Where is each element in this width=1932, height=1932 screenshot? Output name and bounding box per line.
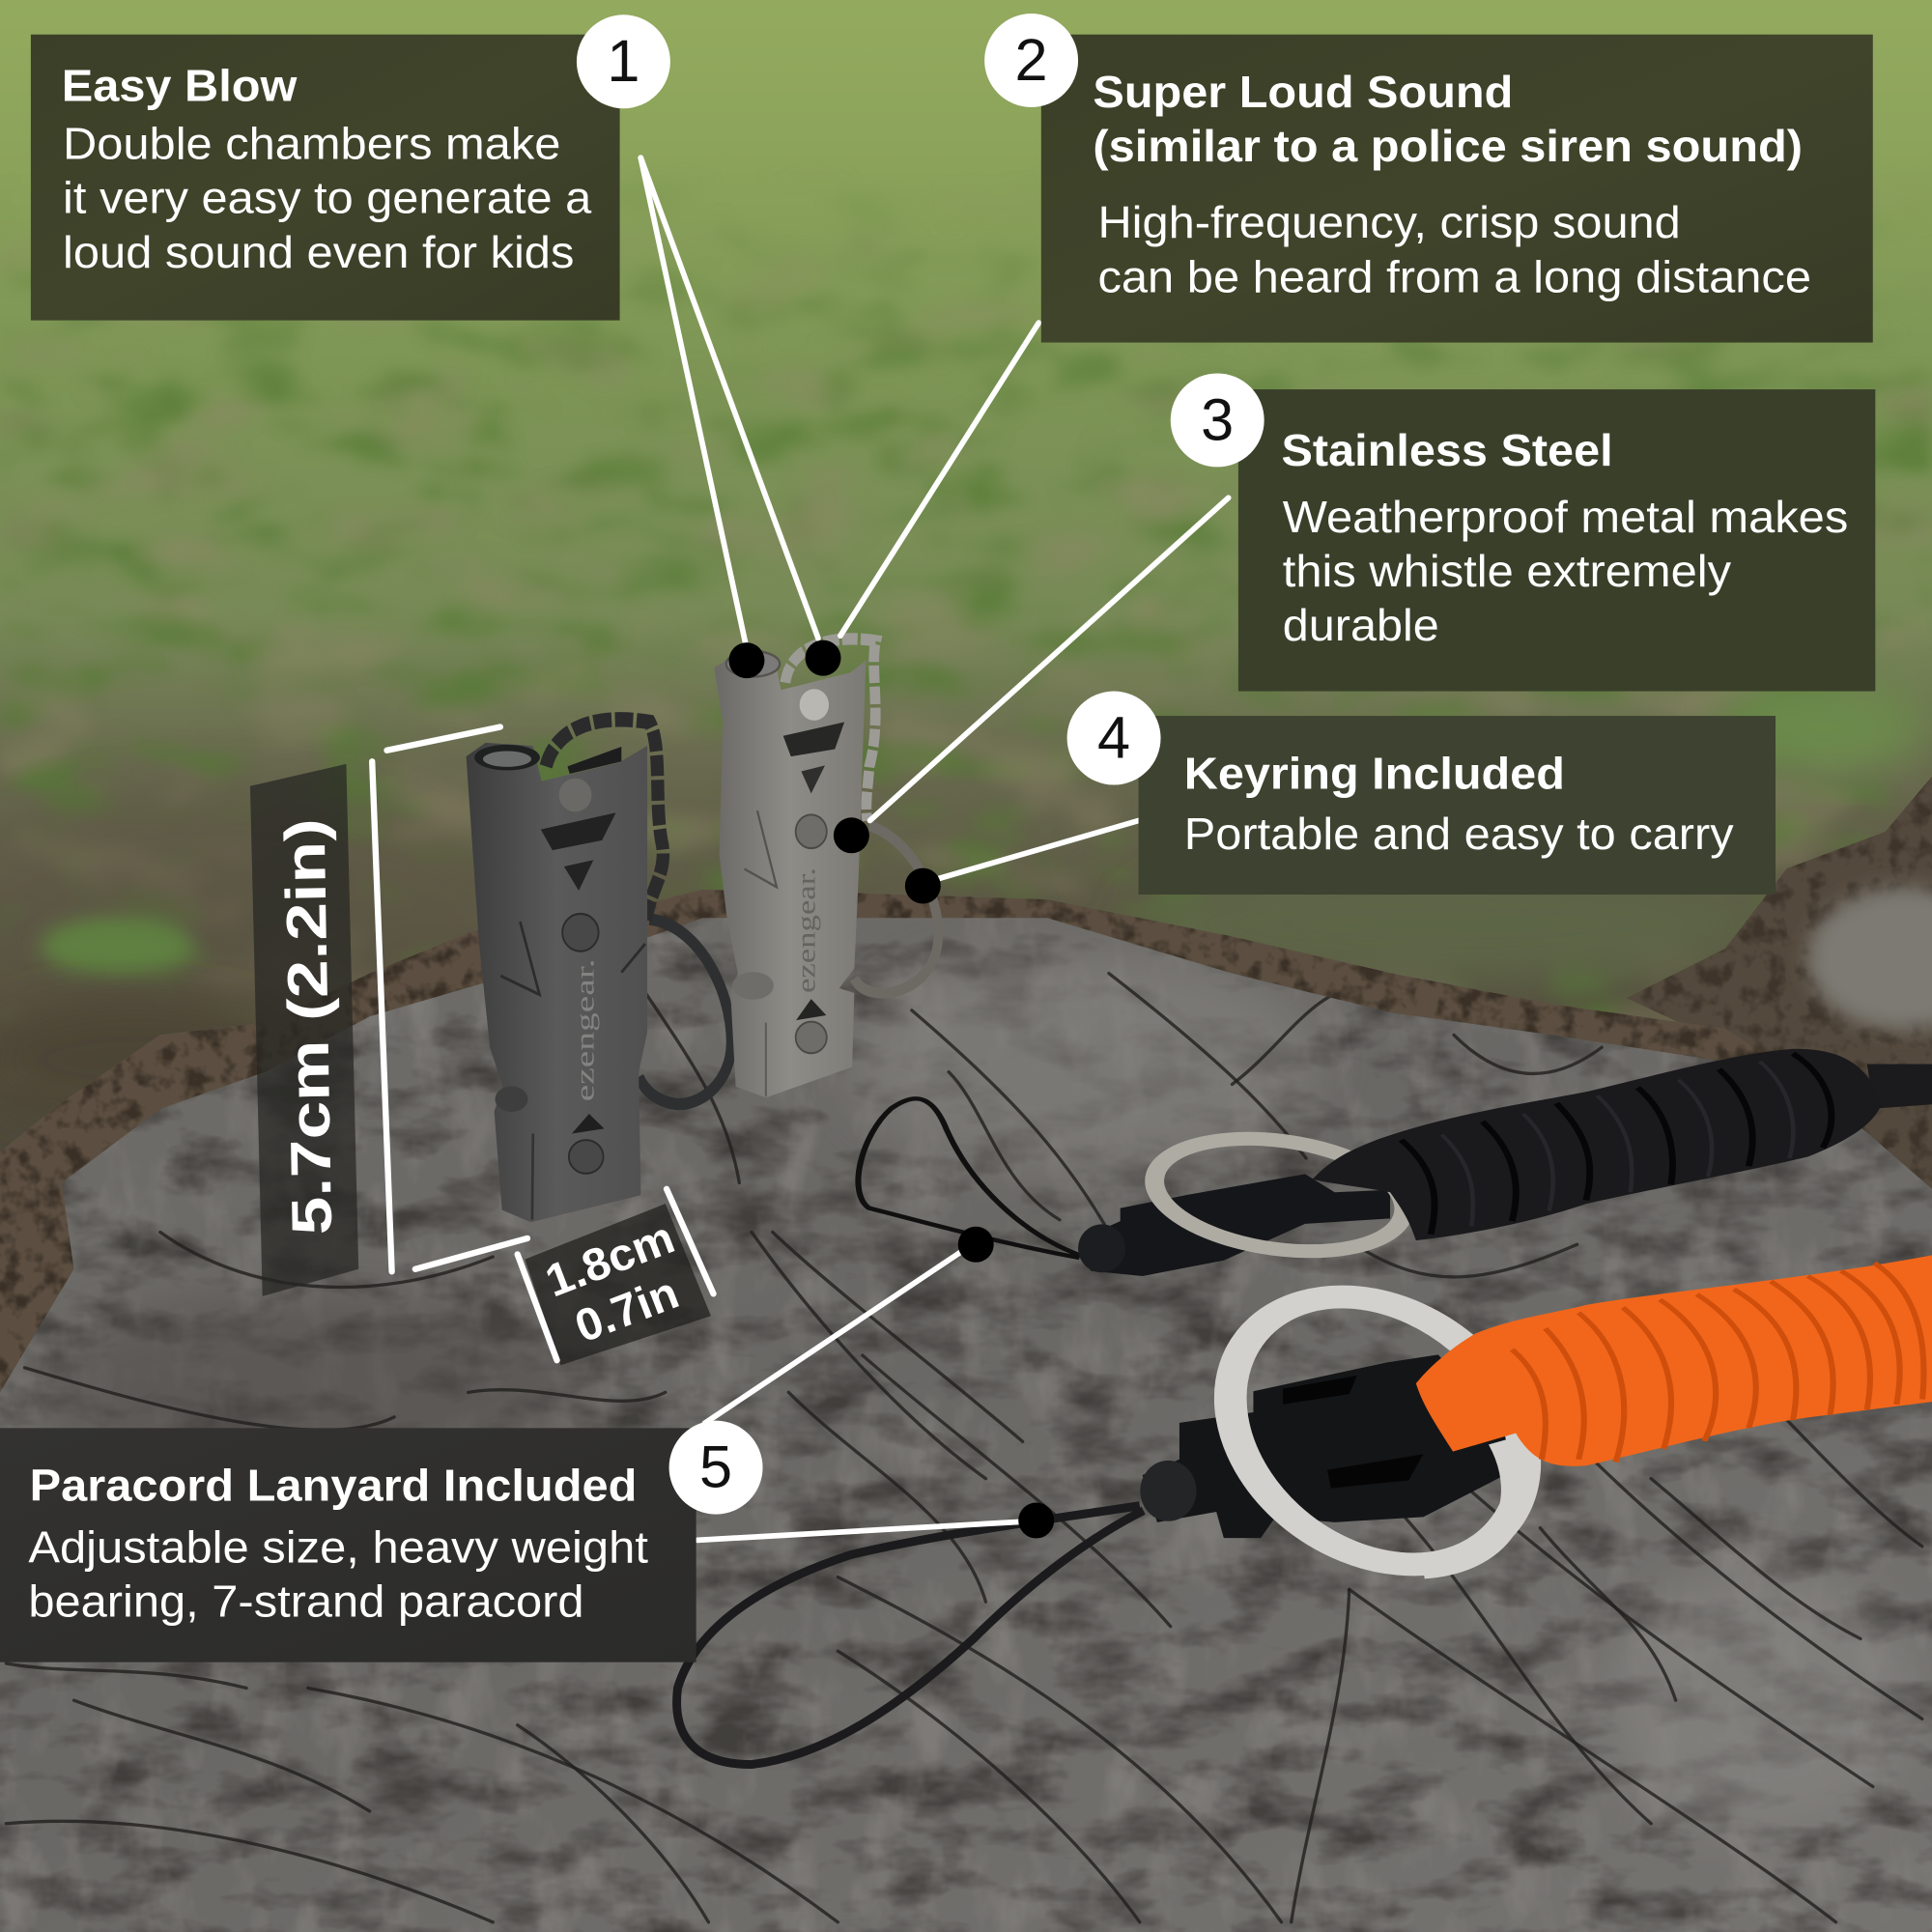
badge 2 [984, 14, 1078, 107]
buckle [1143, 1354, 1512, 1538]
badge 3 [1171, 373, 1264, 467]
body text: Portable and easy to carry [1184, 809, 1734, 859]
tail [1867, 1064, 1932, 1109]
badge 1: 1 [607, 28, 639, 94]
heading: Stainless Steel [1282, 425, 1613, 475]
body text: durable [1283, 600, 1439, 650]
silver whistle ring [854, 826, 938, 993]
body text: Weatherproof metal makes [1283, 492, 1848, 542]
dark whistle [467, 743, 647, 1222]
body text: Double chambers make [63, 119, 560, 169]
heading: Keyring Included [1184, 748, 1565, 798]
stump bark rim [0, 890, 1762, 1392]
heading: Super Loud Sound [1093, 67, 1513, 117]
body text [1097, 197, 1811, 301]
body text: Adjustable size, heavy weight [28, 1521, 648, 1572]
silver whistle chain [785, 639, 876, 820]
body text: this whistle extremely [1283, 546, 1731, 596]
orange lanyard cord loop [677, 1506, 1144, 1765]
badge 5 [669, 1421, 763, 1515]
badge 2: 2 [1015, 27, 1048, 93]
heading: Easy Blow [62, 61, 298, 111]
height dimension label background [250, 764, 358, 1296]
panel 3: stainless steel [1238, 389, 1875, 692]
body text [1283, 492, 1848, 650]
width dimension label [518, 1189, 714, 1365]
body text [28, 1521, 648, 1626]
buckle [1080, 1174, 1390, 1276]
split ring [1177, 1265, 1578, 1596]
badge 4 [1067, 692, 1161, 784]
body text: it very easy to generate a [63, 173, 592, 223]
width dimension label: 0.7in [568, 1267, 686, 1353]
engraved brand text: ezengear. [571, 958, 600, 1101]
body text [63, 119, 592, 277]
heading: Paracord Lanyard Included [30, 1461, 637, 1511]
body text: High-frequency, crisp sound [1097, 197, 1681, 247]
badge 5: 5 [699, 1435, 732, 1500]
leader lines [640, 157, 1229, 1540]
ring front edge [1423, 1441, 1515, 1570]
panel 1: easy blow [31, 35, 620, 321]
badge 4: 4 [1097, 704, 1130, 770]
dark whistle ring [639, 920, 731, 1104]
cord loop [858, 1098, 1080, 1258]
width dimension label: 1.8cm [539, 1212, 681, 1307]
whistle keyrings and chains [546, 639, 938, 1104]
heading: (similar to a police siren sound) [1093, 121, 1803, 171]
panel 2: super loud sound [1041, 35, 1873, 343]
black paracord lanyard [858, 1049, 1932, 1276]
dark whistle chain [546, 720, 663, 924]
anchor dots [728, 640, 1054, 1538]
engraved brand text: ezengear. [792, 867, 821, 993]
heading [1093, 67, 1803, 171]
badge 3: 3 [1201, 386, 1234, 452]
body text: bearing, 7-strand paracord [28, 1576, 584, 1626]
right background stump [1627, 777, 1932, 1208]
orange paracord lanyard [1140, 1255, 1932, 1596]
panel 5: paracord lanyard [0, 1428, 696, 1662]
background: grass field [0, 0, 1932, 1233]
orange rope body [1416, 1255, 1932, 1466]
badge 1 [577, 14, 670, 108]
height dimension text: 5.7cm (2.2in) [274, 818, 344, 1236]
height dimension lines [372, 727, 527, 1271]
body text: loud sound even for kids [63, 227, 574, 277]
key ring [1138, 1122, 1421, 1268]
panel 4: keyring included [1139, 716, 1776, 895]
body text: can be heard from a long distance [1097, 251, 1811, 301]
silver whistle [714, 651, 866, 1097]
tree stump surface [0, 863, 1932, 1932]
